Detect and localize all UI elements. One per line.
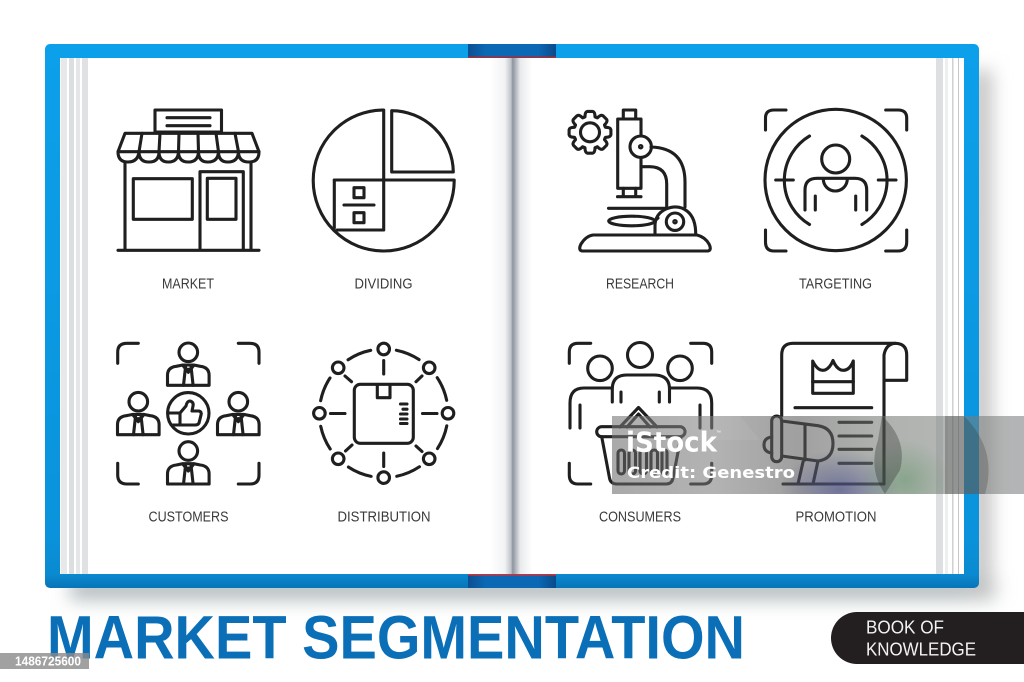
icon: customers	[118, 343, 259, 484]
watermark credit: Credit: Genestro	[627, 463, 795, 482]
watermark band	[612, 416, 1024, 494]
label: consumers: CONSUMERS	[599, 510, 681, 526]
icon: dividing pie chart	[313, 110, 454, 251]
stock id tag	[0, 653, 89, 669]
open book	[45, 44, 979, 588]
pages	[60, 58, 964, 574]
icon: consumers with basket	[569, 342, 712, 484]
watermark brand: iStock	[626, 426, 718, 458]
icon: targeting person	[765, 109, 907, 251]
book shadow	[70, 70, 995, 600]
spine band bottom	[468, 574, 556, 588]
stock id tag: 1486725600	[15, 654, 81, 668]
watermark trademark: ™	[716, 430, 721, 436]
icon: promotion document and megaphone	[764, 343, 907, 484]
label: customers: CUSTOMERS	[148, 510, 228, 526]
label: research: RESEARCH	[606, 276, 674, 292]
badge: book of knowledge: BOOK OF	[866, 616, 944, 638]
label: targeting: TARGETING	[799, 276, 872, 292]
icon: market shop	[118, 110, 259, 250]
icon: research microscope	[569, 110, 710, 251]
spine band top	[468, 44, 556, 58]
label: dividing: DIVIDING	[354, 276, 412, 292]
label: market: MARKET	[162, 276, 214, 292]
icon: distribution	[314, 343, 454, 483]
label: distribution: DISTRIBUTION	[338, 510, 430, 526]
badge: book of knowledge: KNOWLEDGE	[866, 638, 976, 660]
badge: book of knowledge	[831, 612, 1024, 664]
book cover	[45, 44, 979, 588]
label: promotion: PROMOTION	[796, 510, 876, 526]
title: MARKET SEGMENTATION	[47, 603, 745, 671]
